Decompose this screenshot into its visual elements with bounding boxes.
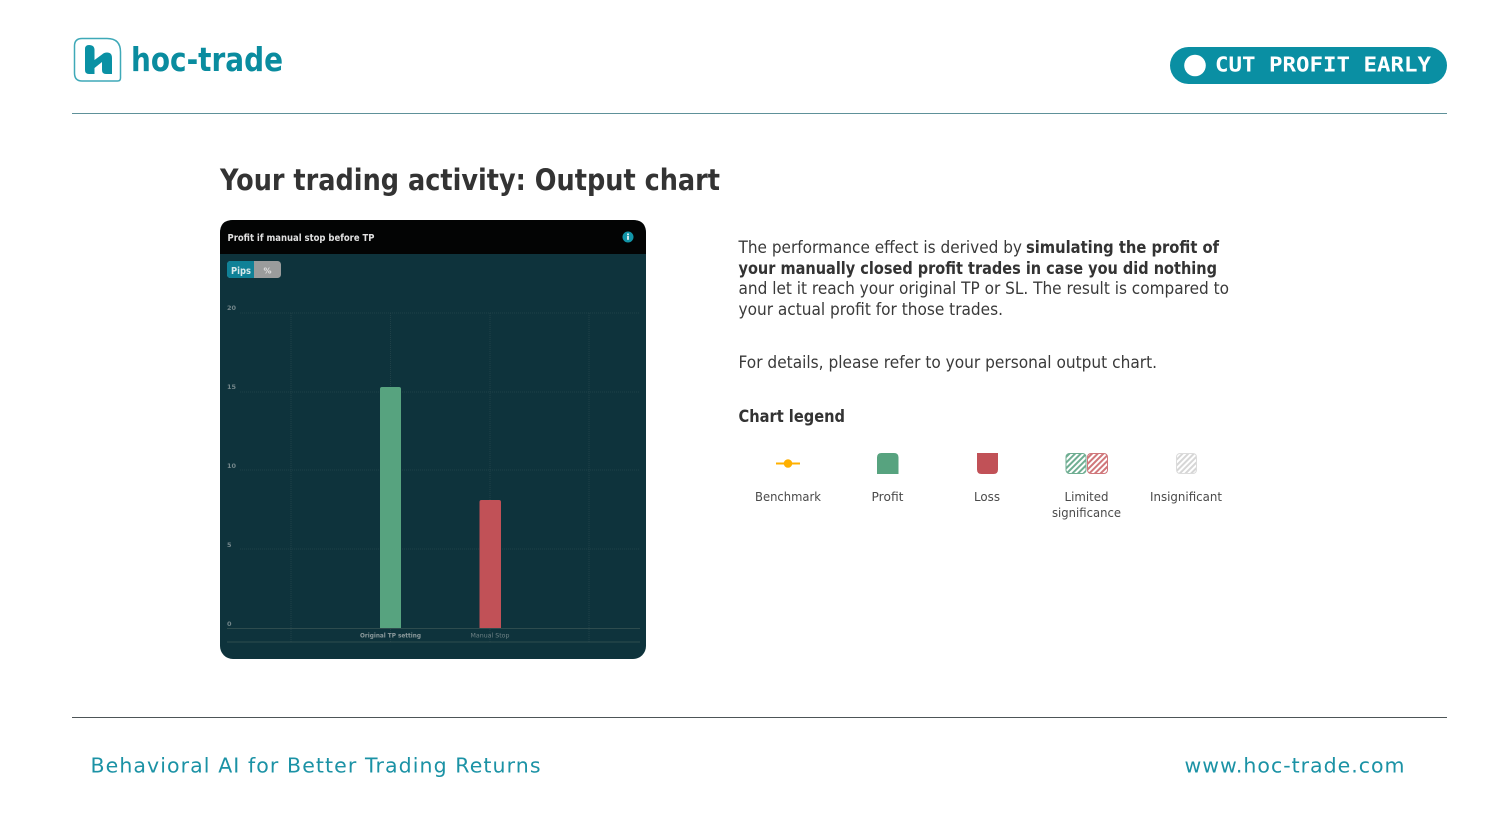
legend item: insignificant: Insignificant	[1150, 489, 1222, 504]
axis labels: 15	[227, 383, 237, 391]
axis labels	[227, 304, 237, 628]
category label: manual stop: Manual Stop	[470, 632, 510, 640]
legend item: insignificant	[1150, 454, 1222, 504]
legend item: benchmark	[755, 459, 822, 504]
footer website: www.hoc-trade.com	[1184, 754, 1404, 778]
legend	[755, 453, 1222, 520]
panel: output chart	[220, 220, 646, 659]
text block: explanation	[738, 238, 1229, 319]
axis labels: 10	[227, 462, 237, 470]
text block: explanation: The performance effect is derived by	[738, 238, 1022, 257]
category label: original tp setting: Original TP setting	[360, 632, 421, 640]
logo icon	[74, 38, 120, 81]
legend item: profit: Profit	[872, 489, 904, 504]
icon: info	[622, 232, 634, 242]
chart heading: Profit if manual stop before TP	[228, 233, 375, 244]
logo	[74, 38, 283, 81]
text block: explanation: simulating the profit of	[1026, 238, 1220, 257]
legend item: loss: Loss	[974, 489, 1000, 504]
legend item: limited significance	[1052, 454, 1121, 520]
title: Your trading activity: Output chart	[219, 163, 720, 197]
badge: cut profit early: CUT PROFIT EARLY	[1215, 52, 1431, 76]
legend item: profit	[872, 453, 904, 504]
axis labels: 0	[227, 620, 232, 628]
axis labels: 5	[227, 541, 232, 549]
toggle: pips / percent: %	[264, 266, 272, 276]
text block: explanation: your actual profit for those trades.	[738, 300, 1003, 319]
text block: explanation: and let it reach your original TP or SL. The result is compared to	[738, 279, 1229, 298]
heading: chart legend: Chart legend	[738, 407, 845, 426]
toggle: pips / percent	[227, 261, 281, 278]
text block: explanation: your manually closed profit trades in case you did nothing	[738, 259, 1217, 278]
legend item: loss	[974, 453, 1000, 504]
legend item: limited significance: significance	[1052, 505, 1121, 520]
legend item: benchmark: Benchmark	[755, 489, 822, 504]
badge: cut profit early	[1170, 47, 1447, 84]
logo wordmark: hoc-trade	[131, 40, 283, 79]
toggle: pips / percent: Pips	[231, 266, 251, 277]
text block: details: For details, please refer to your personal output chart.	[738, 353, 1157, 372]
bar: manual stop	[480, 500, 501, 628]
footer tagline: Behavioral AI for Better Trading Returns	[90, 754, 540, 778]
bar chart	[227, 304, 640, 642]
bar: original tp setting	[380, 387, 401, 628]
axis labels: 20	[227, 304, 237, 312]
legend item: limited significance: Limited	[1064, 489, 1108, 504]
